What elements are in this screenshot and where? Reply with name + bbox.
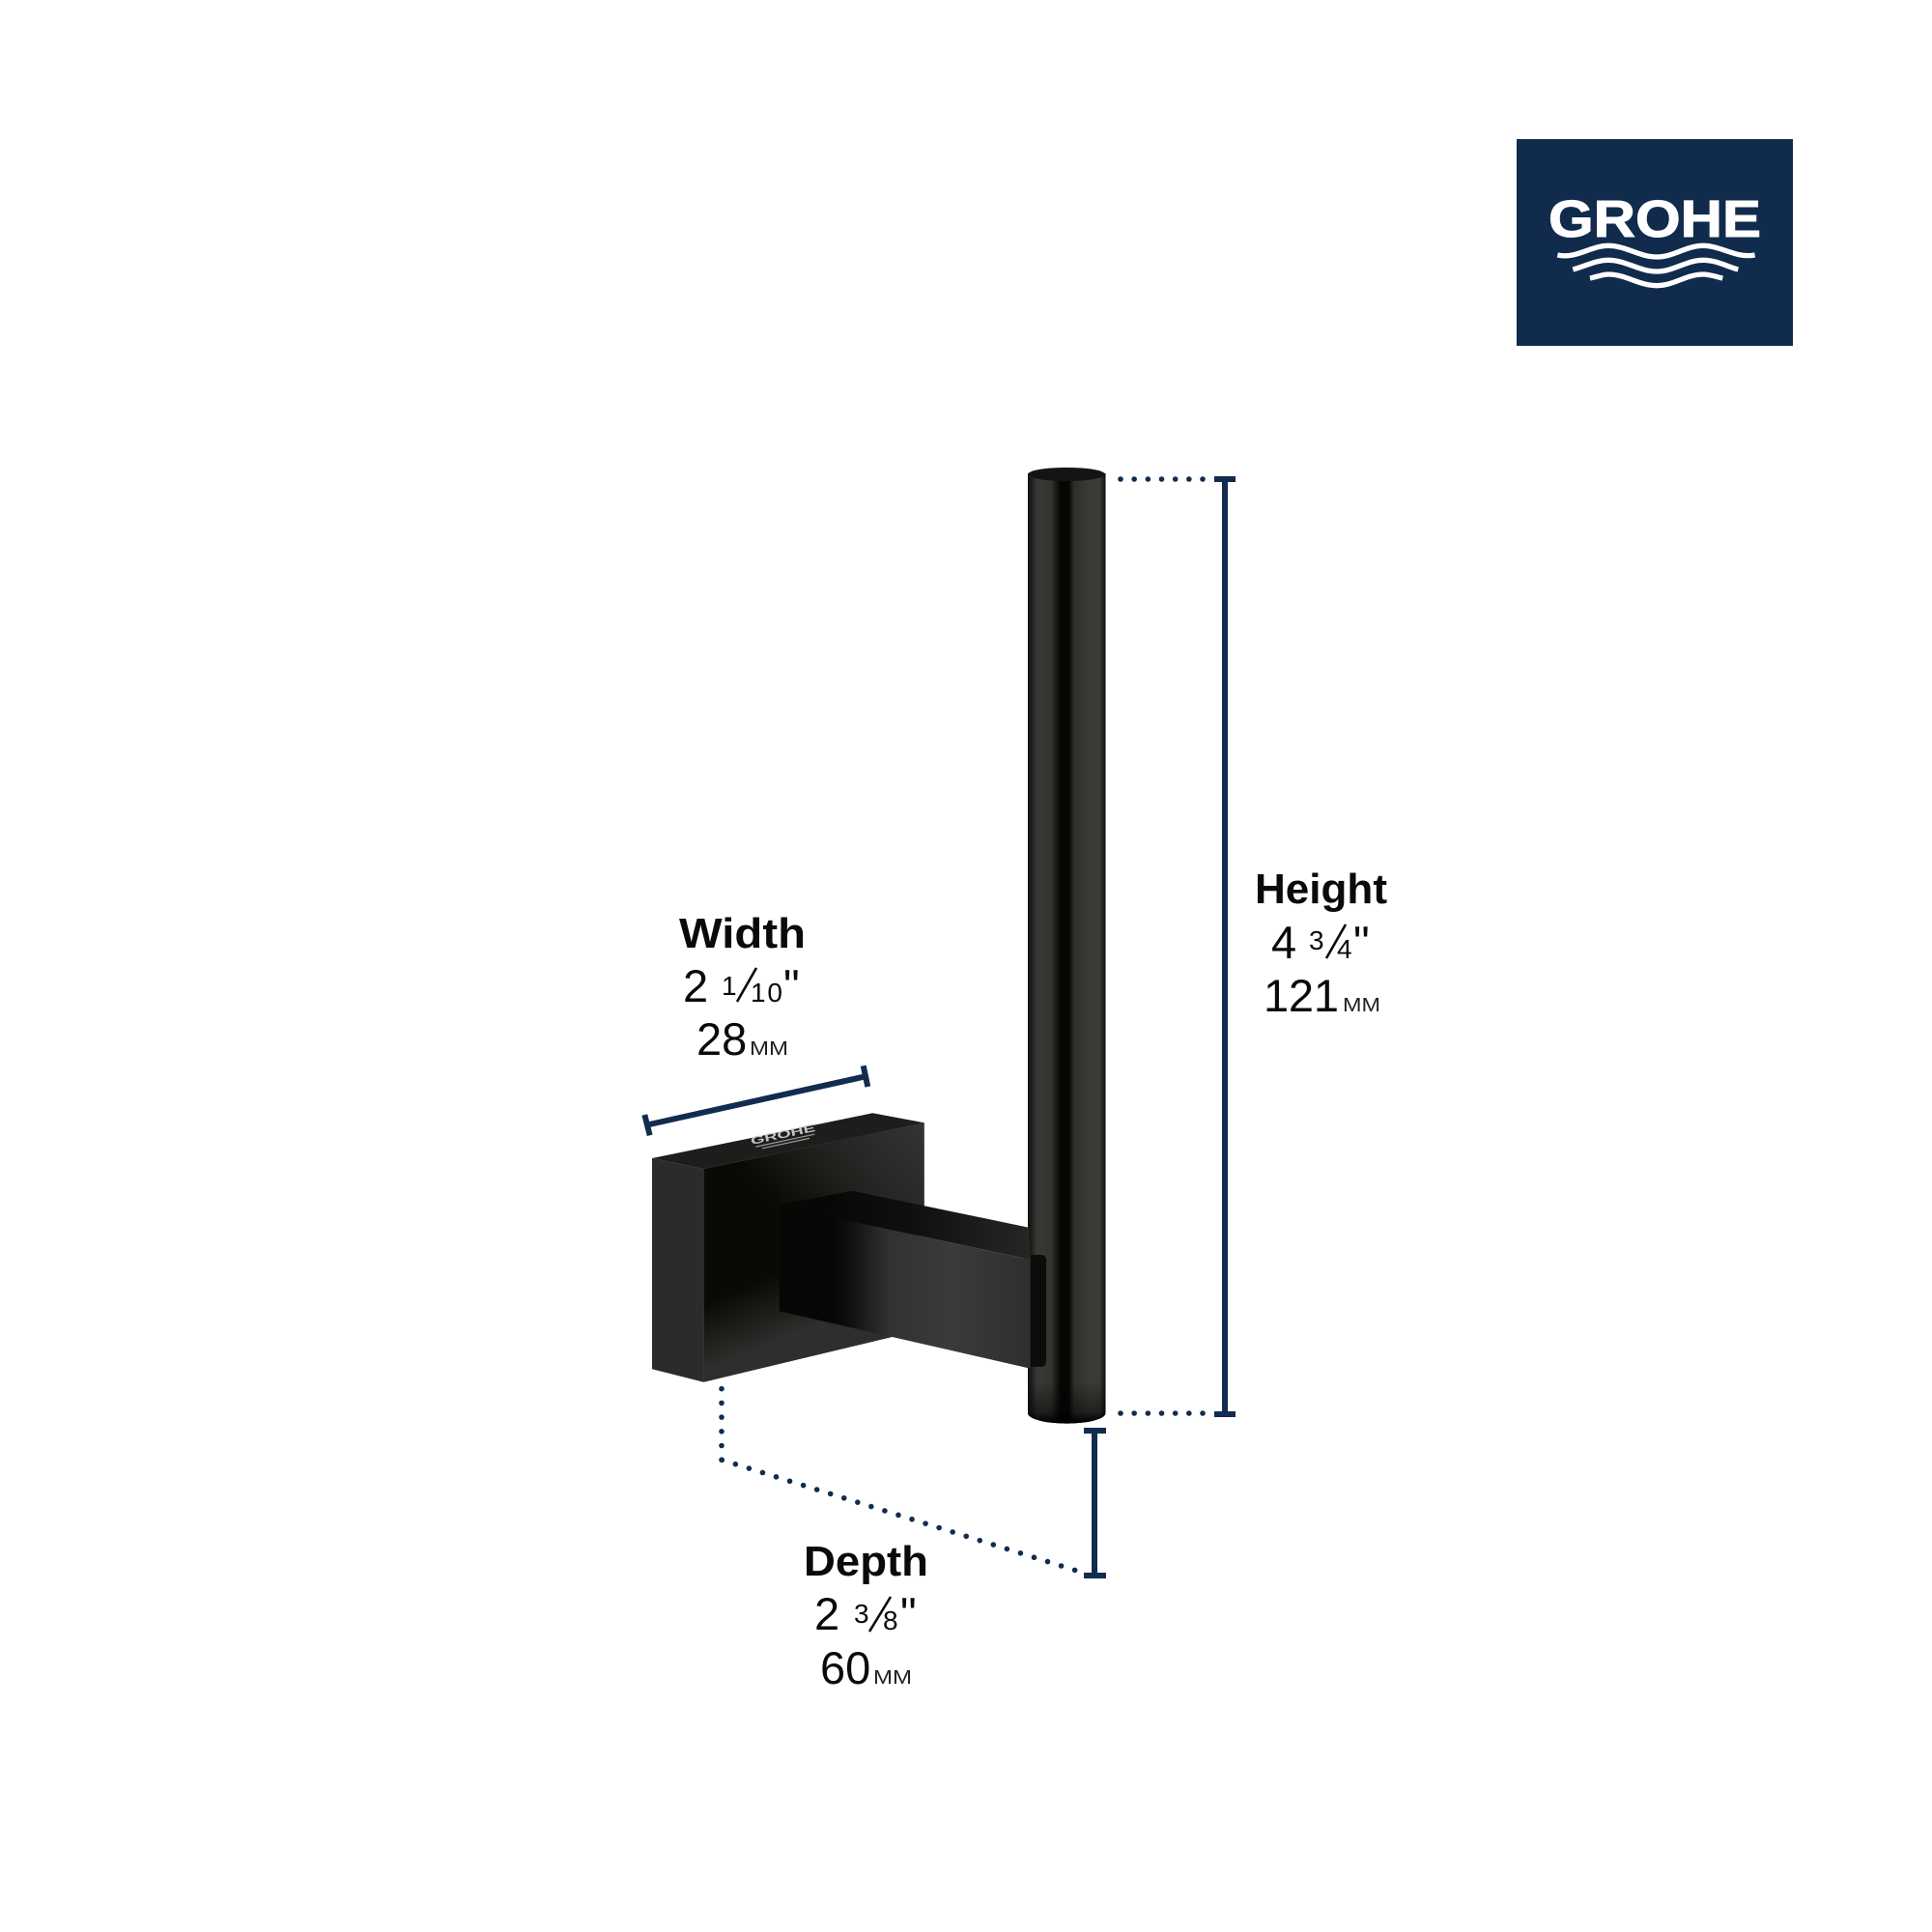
label: height	[1255, 866, 1387, 1021]
label: height: 3	[1309, 925, 1324, 955]
label: depth: MM	[873, 1667, 912, 1689]
plate engraved logo	[750, 1122, 817, 1151]
label: height: Height	[1255, 866, 1387, 913]
label: width: MM	[750, 1038, 788, 1060]
height bottom guide dots	[1121, 1410, 1208, 1416]
logo waves	[1557, 245, 1755, 286]
wall plate	[652, 1113, 927, 1382]
label: height: 4	[1337, 934, 1352, 964]
label: depth: Depth	[804, 1538, 928, 1585]
label: depth	[804, 1538, 928, 1693]
label: depth: 60	[820, 1642, 870, 1693]
plate engraved logo: GROHE	[750, 1122, 816, 1148]
label: width: 2	[683, 960, 708, 1011]
label: width: 1	[722, 971, 737, 1001]
label: width: 10	[751, 978, 782, 1008]
label: depth: 3	[854, 1599, 869, 1629]
height top guide dots	[1121, 476, 1208, 482]
logo: GROHE	[1517, 139, 1793, 346]
label: width	[679, 910, 806, 1065]
product: spare roll holder	[652, 468, 1105, 1424]
vertical pole	[1028, 468, 1105, 1424]
logo wordmark: GROHE	[1548, 190, 1761, 248]
label: height: 121	[1264, 970, 1339, 1021]
dimension: width	[644, 1065, 867, 1135]
label: height: MM	[1343, 995, 1380, 1016]
depth guide dots	[719, 1389, 724, 1460]
label: width: Width	[679, 910, 806, 957]
label: height: "	[1353, 917, 1370, 968]
label: width: 28	[696, 1013, 747, 1065]
label: depth: "	[900, 1588, 917, 1639]
dimension: depth	[722, 1389, 1106, 1576]
label: depth: 2	[814, 1588, 839, 1639]
collar	[1024, 1255, 1046, 1367]
dimension: height	[1121, 479, 1236, 1414]
label: depth: 8	[883, 1605, 898, 1635]
label: width: "	[783, 960, 800, 1011]
arm	[780, 1191, 1031, 1369]
label: height: 4	[1271, 917, 1296, 968]
